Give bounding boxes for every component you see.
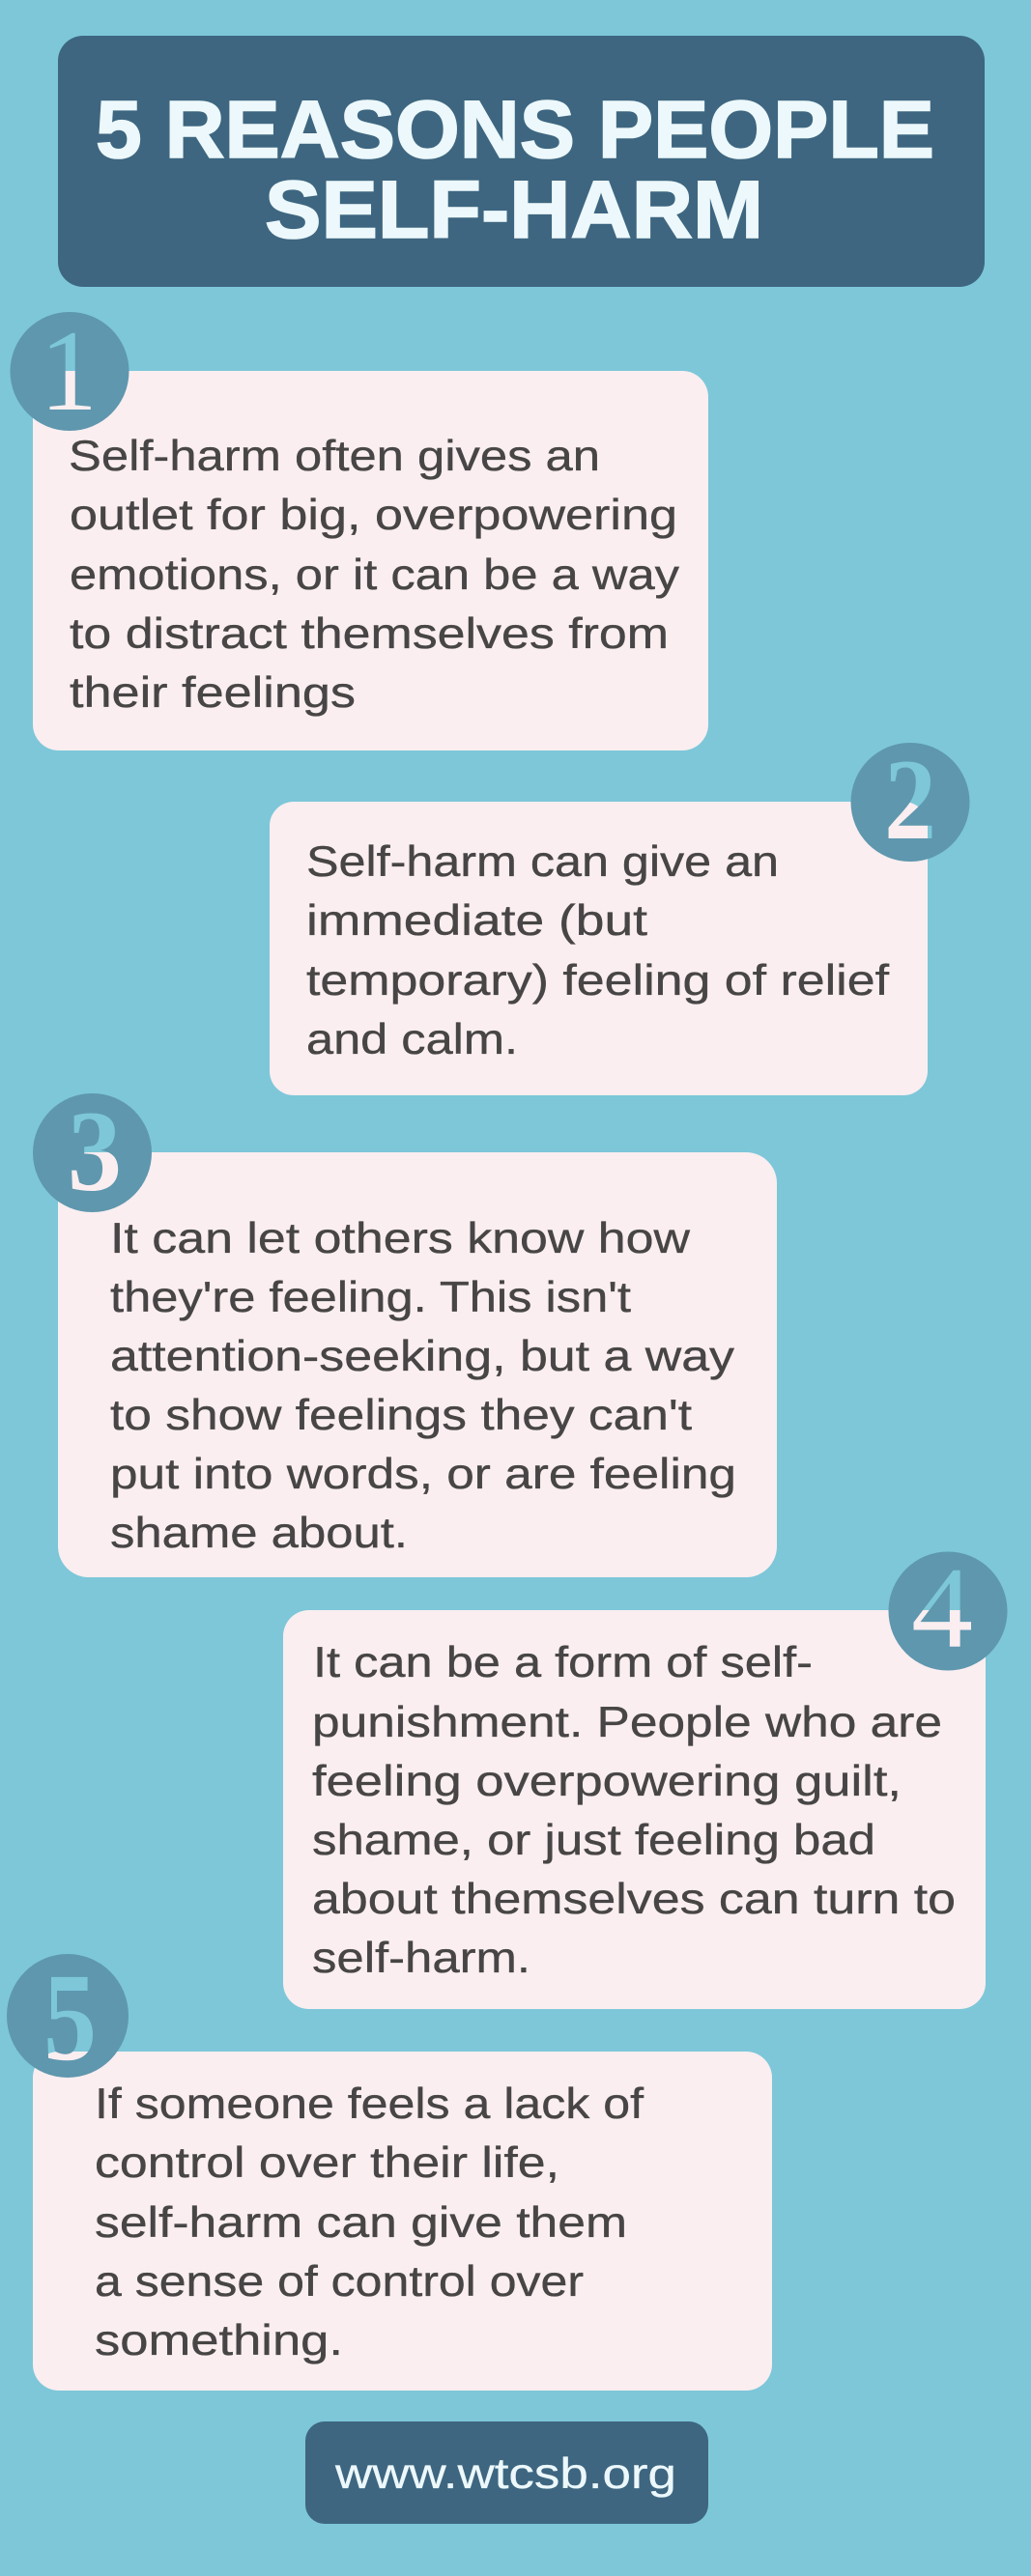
title banner — [58, 36, 985, 287]
reason 2 text: temporary) feeling of relief — [306, 957, 890, 1005]
footer website badge — [305, 2421, 708, 2524]
website url: www.wtcsb.org — [334, 2450, 676, 2498]
reason 1 text: their feelings — [70, 669, 356, 717]
reason 4 text: about themselves can turn to — [312, 1876, 956, 1923]
reason 2 text: and calm. — [306, 1016, 518, 1063]
reason 4 text: self-harm. — [312, 1935, 530, 1982]
reason 4 text — [312, 1639, 956, 1982]
title: 5 REASONS PEOPLE — [96, 84, 934, 175]
reason 1 text — [69, 433, 680, 717]
reason 3 text: put into words, or are feeling — [110, 1451, 736, 1498]
number badge 1 — [10, 312, 129, 431]
number badge 2 — [850, 743, 970, 862]
reason 4 text: punishment. People who are — [312, 1699, 942, 1746]
reason 5 text: a sense of control over — [95, 2258, 584, 2306]
number badge 4 — [889, 1551, 1007, 1671]
reason 5 text: something. — [95, 2317, 343, 2364]
reason 3 text: It can let others know how — [110, 1215, 691, 1262]
reason 1 text: to distract themselves from — [70, 610, 669, 658]
reason 1 text: outlet for big, overpowering — [70, 492, 677, 539]
reason 3 text — [110, 1215, 736, 1557]
panel: reason 1 — [10, 312, 708, 750]
reason 3 text: they're feeling. This isn't — [110, 1274, 632, 1321]
title — [96, 84, 934, 255]
reason 3 text: attention-seeking, but a way — [110, 1333, 735, 1380]
title: SELF-HARM — [265, 164, 763, 255]
reason 2 text — [306, 838, 890, 1063]
reason 5 text: self-harm can give them — [95, 2199, 627, 2247]
reason 4 text: shame, or just feeling bad — [312, 1817, 875, 1864]
reason 5 text: control over their life, — [95, 2139, 559, 2187]
reason 3 text: shame about. — [110, 1510, 408, 1557]
reason 5 text: If someone feels a lack of — [95, 2081, 644, 2128]
reason 2 text: Self-harm can give an — [306, 838, 779, 886]
reason 5 text — [95, 2081, 644, 2364]
reason 1 text: emotions, or it can be a way — [70, 552, 680, 599]
panel: reason 5 — [7, 1954, 772, 2391]
panel: reason 2 — [270, 743, 970, 1095]
reason 4 text: It can be a form of self- — [313, 1639, 813, 1686]
reason 1 text: Self-harm often gives an — [69, 433, 600, 480]
reason 2 text: immediate (but — [306, 897, 648, 945]
reason 3 text: to show feelings they can't — [110, 1392, 693, 1439]
reason 4 text: feeling overpowering guilt, — [312, 1758, 902, 1805]
panel: reason 3 — [33, 1093, 777, 1577]
panel: reason 4 — [283, 1551, 1007, 2009]
number badge 5 — [7, 1954, 129, 2078]
number badge 3 — [33, 1093, 152, 1212]
